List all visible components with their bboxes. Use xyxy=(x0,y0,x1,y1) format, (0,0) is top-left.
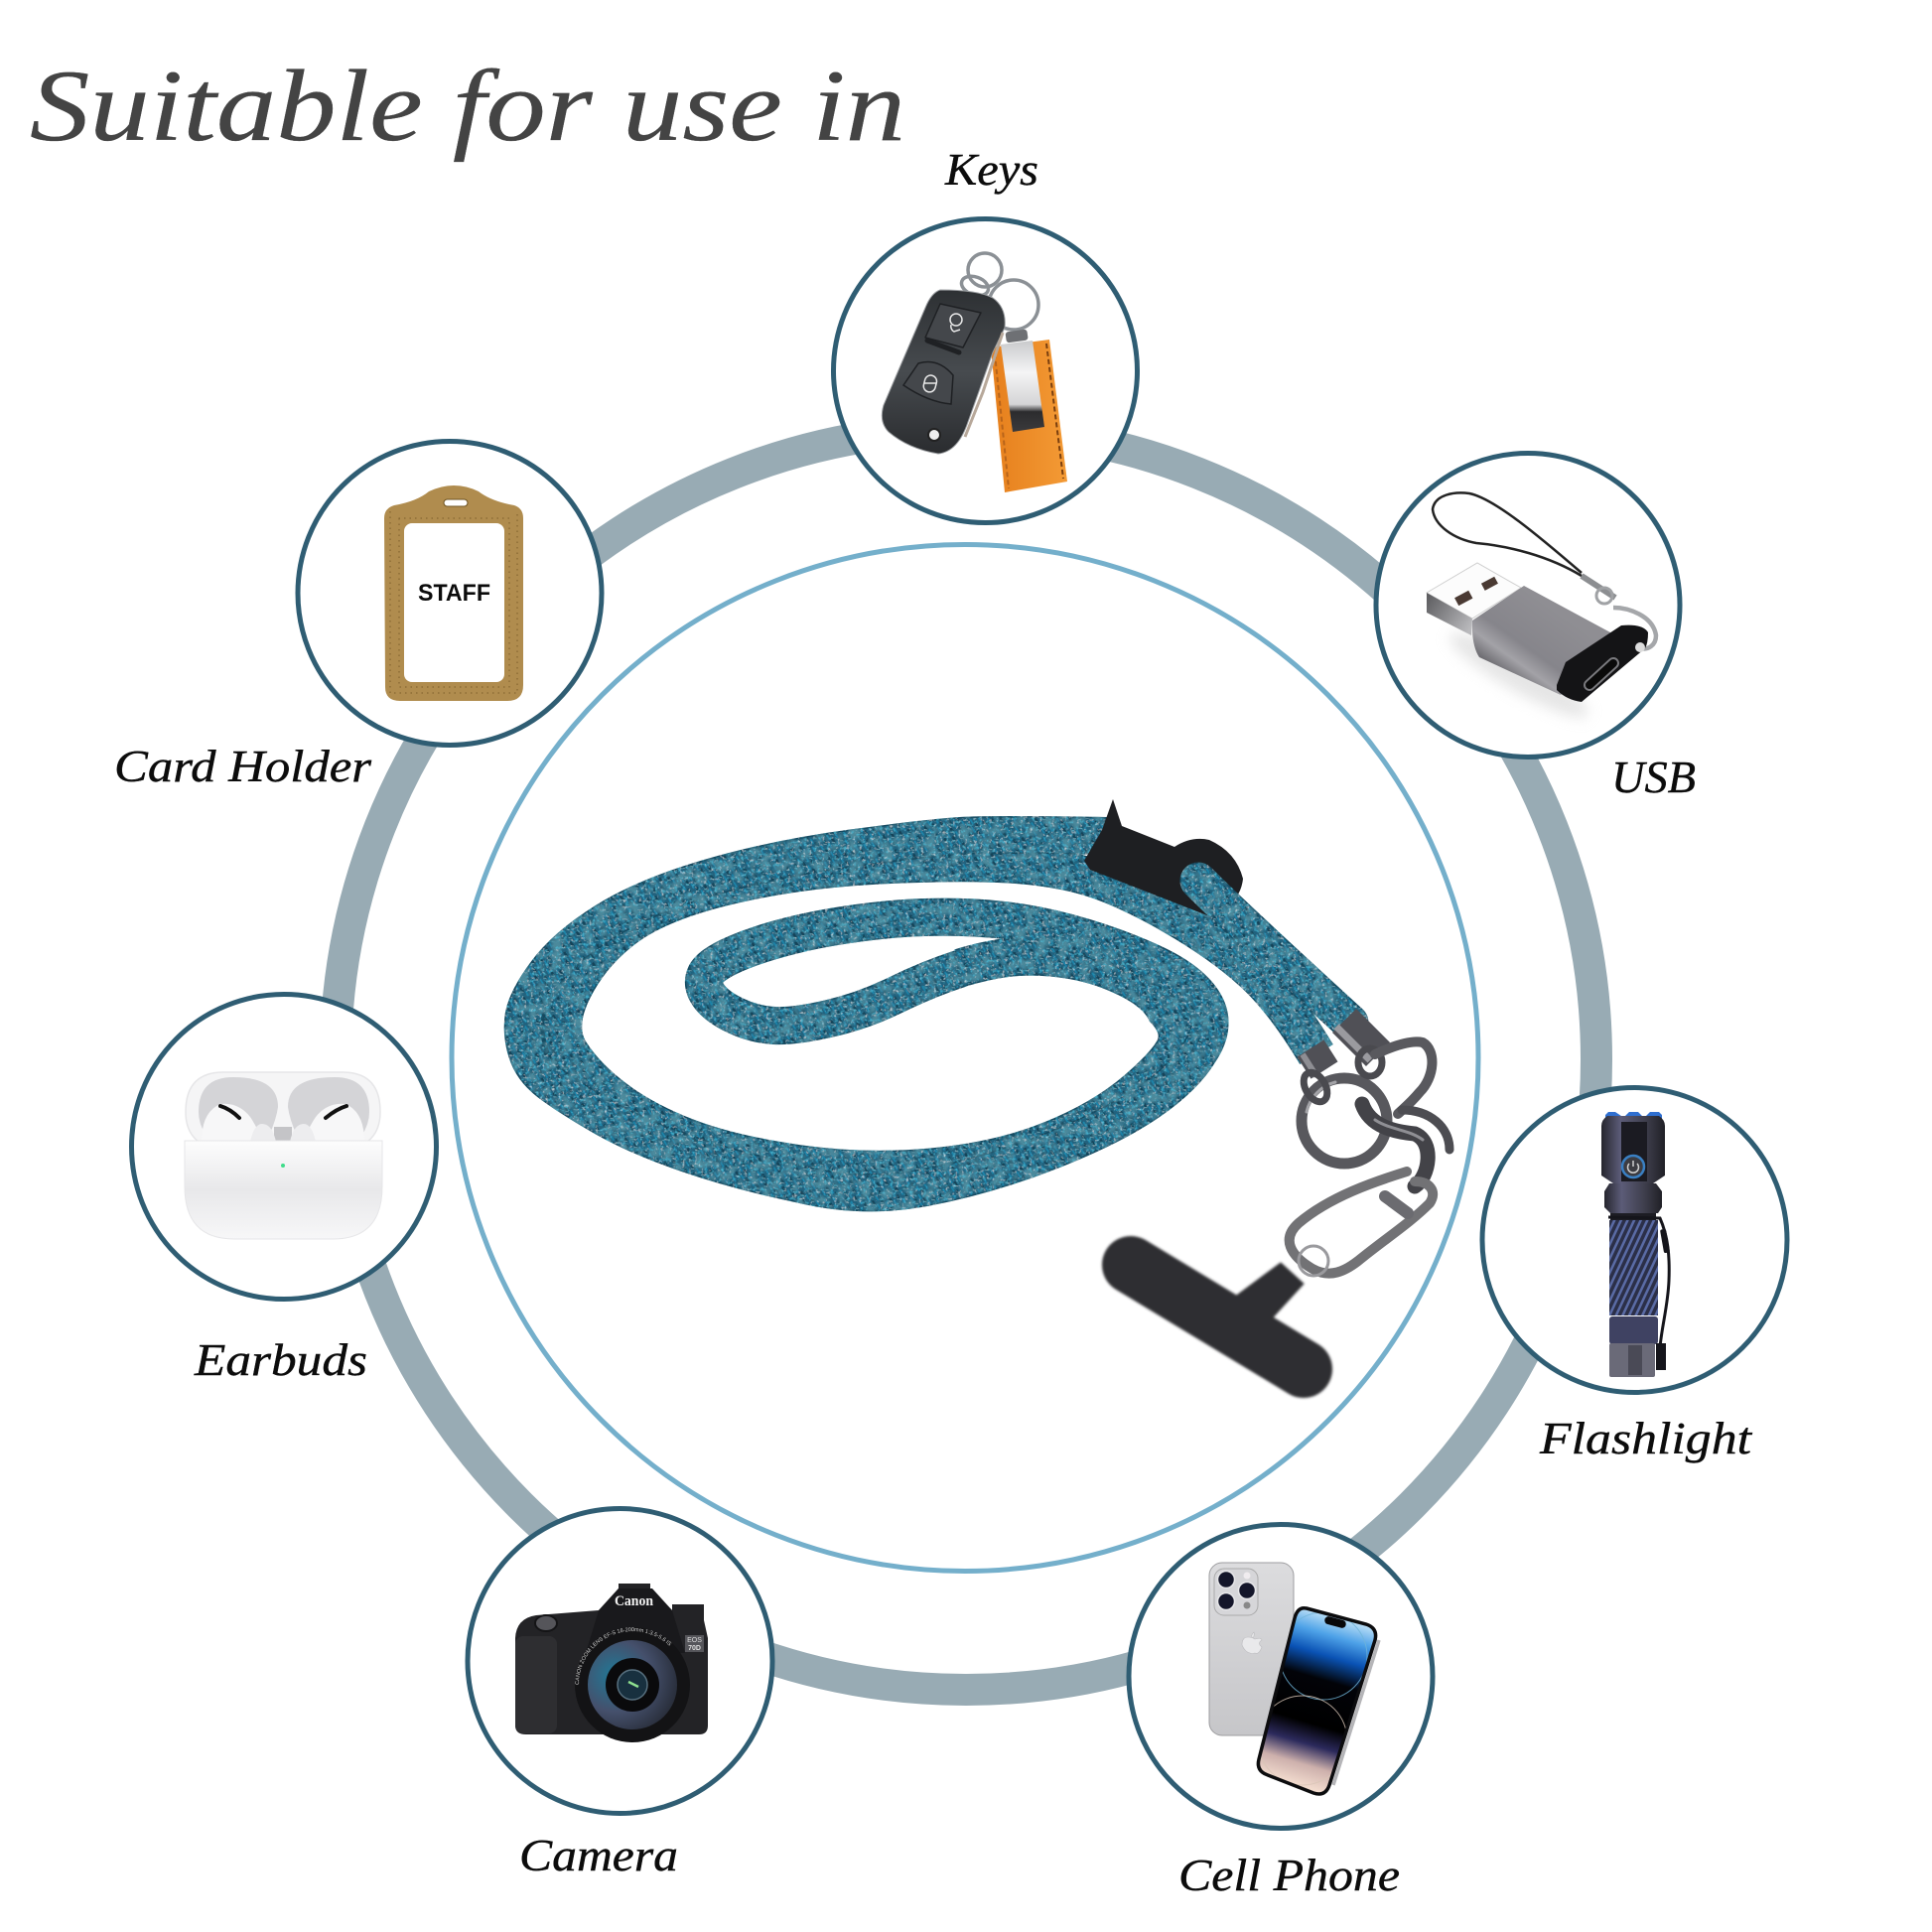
icon: car key fob xyxy=(882,290,1005,454)
inner blue circle xyxy=(452,544,1478,1571)
earbuds circle xyxy=(131,995,437,1299)
card holder circle xyxy=(298,441,602,745)
icon: phone back xyxy=(1209,1563,1294,1735)
panel: cell phone xyxy=(1129,1525,1433,1829)
icon: earbuds case xyxy=(185,1072,382,1239)
keys circle xyxy=(834,218,1138,522)
label: USB: USB xyxy=(1611,753,1696,802)
label: Camera: Camera xyxy=(519,1831,678,1880)
icon: phone front xyxy=(1258,1608,1379,1794)
panel: card holder xyxy=(298,441,602,745)
flashlight circle xyxy=(1482,1088,1787,1392)
label: Earbuds: Earbuds xyxy=(194,1335,367,1385)
outer grey ring xyxy=(336,429,1596,1690)
panel: camera xyxy=(465,1506,774,1816)
chain, rings and carabiner xyxy=(1290,1041,1449,1276)
phone circle xyxy=(1129,1525,1433,1829)
panel: earbuds xyxy=(131,995,437,1299)
label: Flashlight: Flashlight xyxy=(1539,1414,1753,1463)
label: Card Holder: Card Holder xyxy=(114,742,372,791)
text: STAFF: STAFF xyxy=(418,580,490,607)
text: EOS 70D: EOS xyxy=(687,1637,702,1644)
text: EOS 70D: 70D xyxy=(688,1645,701,1652)
title: Suitable for use in xyxy=(30,50,905,163)
icon: usb adapter xyxy=(1427,492,1656,729)
panel: keys xyxy=(834,218,1138,522)
metal ferrules xyxy=(1303,1021,1378,1076)
text: lens ring: CANON ZOOM LENS EF-S 18-200mm 1:3.5-5.6 IS xyxy=(575,1627,671,1685)
label: Cell Phone: Cell Phone xyxy=(1178,1851,1400,1900)
lanyard product xyxy=(523,799,1449,1369)
rope strand to right ferrule xyxy=(1198,881,1350,1023)
icon: leather badge holder xyxy=(384,485,523,701)
text: Canon: Canon xyxy=(615,1593,654,1609)
rubber slider xyxy=(1084,799,1243,917)
icon: orange key tag xyxy=(991,330,1067,492)
usb circle xyxy=(1376,453,1680,757)
camera circle xyxy=(468,1509,772,1813)
phone tether tab xyxy=(1131,1263,1304,1369)
label: Keys: Keys xyxy=(944,145,1038,195)
panel: flashlight xyxy=(1482,1088,1787,1392)
panel: USB xyxy=(1376,453,1680,757)
icon: DSLR camera xyxy=(515,1584,708,1742)
icon: key rings xyxy=(959,253,1038,330)
icon: flashlight xyxy=(1601,1112,1670,1377)
rope loops xyxy=(523,835,1316,1192)
